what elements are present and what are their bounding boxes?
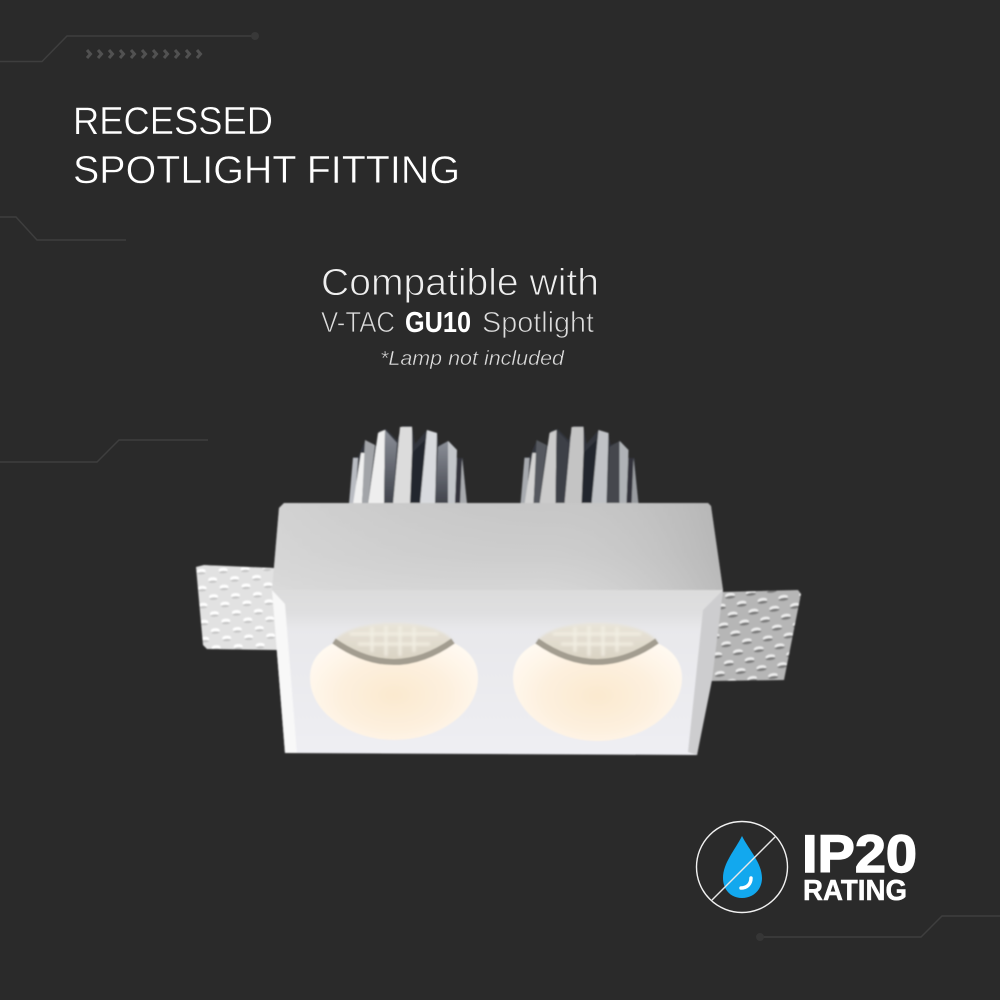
subtitle: compatibility note: Compatible with xyxy=(321,262,599,304)
housing right bevel xyxy=(688,590,723,755)
left heat-sink fins xyxy=(349,426,467,504)
right perforated wing xyxy=(711,590,801,681)
icon: crossed-out water drop xyxy=(696,822,788,912)
left recessed opening xyxy=(310,623,478,740)
IP20 rating badge xyxy=(696,822,917,912)
rating label xyxy=(802,825,917,907)
title: RECESSED xyxy=(73,100,273,143)
subtitle: compatibility note xyxy=(321,262,599,370)
housing left bevel xyxy=(272,590,297,753)
subtitle: compatibility note: *Lamp not included xyxy=(380,348,565,370)
chevron row decoration xyxy=(87,50,200,58)
right heat-sink fins xyxy=(520,426,638,504)
subtitle: compatibility note: GU10 xyxy=(405,307,471,339)
left perforated wing xyxy=(196,565,278,650)
product photo: double recessed fitting xyxy=(196,426,801,755)
housing front face xyxy=(272,590,723,755)
rating label: IP20 xyxy=(802,825,917,884)
subtitle: compatibility note: V-TAC xyxy=(321,307,395,339)
housing top face xyxy=(272,503,723,590)
title: SPOTLIGHT FITTING xyxy=(73,149,460,192)
title xyxy=(73,100,460,192)
subtitle: compatibility note: Spotlight xyxy=(482,307,594,339)
right recessed opening xyxy=(513,623,682,741)
rating label: RATING xyxy=(803,875,907,907)
